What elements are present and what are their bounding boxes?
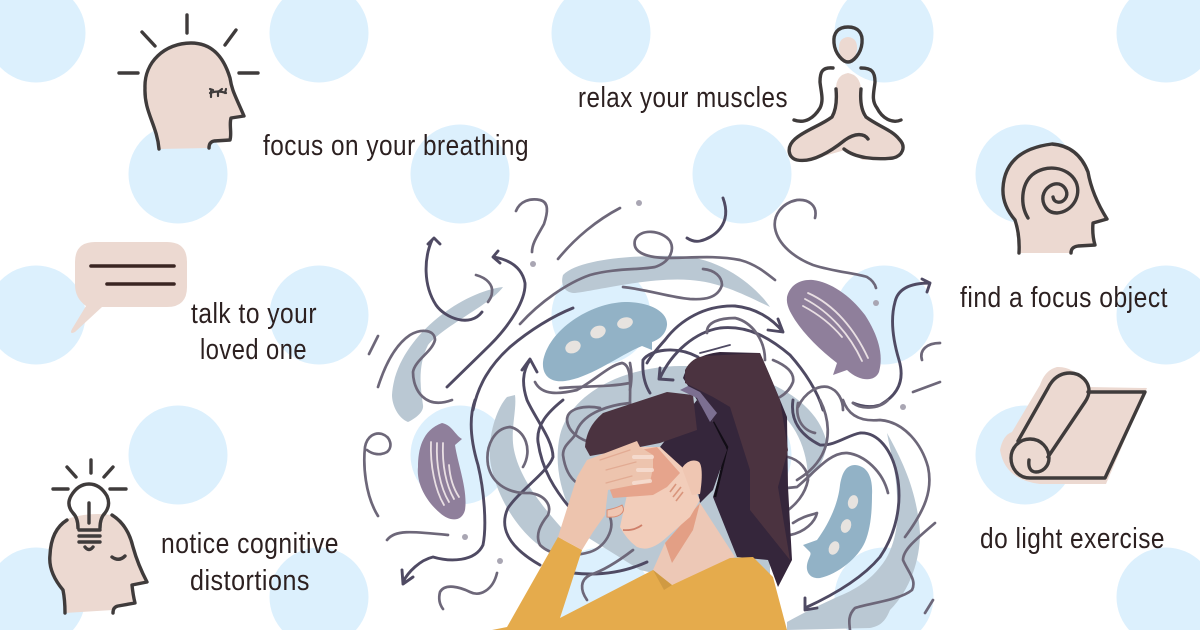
icon: meditating figure [789, 27, 903, 160]
woman: shirt [492, 537, 787, 630]
label: talk to your loved one: talk to your [191, 298, 317, 330]
tangled lines [364, 198, 940, 630]
speech bubble: blue right [803, 465, 872, 578]
icon: speech bubble [71, 242, 187, 333]
woman: front hair [585, 392, 697, 456]
label: focus on your breathing: focus on your breathing [263, 130, 529, 162]
label: notice cognitive distortions: notice cognitive [161, 528, 339, 560]
label: find a focus object: find a focus object [960, 282, 1168, 314]
speech bubble: purple top right [787, 280, 881, 379]
label: notice cognitive distortions: distortions [190, 565, 310, 597]
dots [462, 200, 906, 564]
label: notice cognitive distortions [161, 528, 339, 597]
label: talk to your loved one: loved one [200, 334, 307, 366]
illustration: woman with tangled thoughts [364, 198, 940, 630]
label: do light exercise: do light exercise [980, 523, 1165, 555]
woman: ponytail [683, 352, 792, 587]
swirl bands [392, 256, 920, 630]
label: relax your muscles: relax your muscles [578, 82, 788, 114]
woman: hand and arm [558, 441, 653, 550]
label: talk to your loved one [191, 298, 317, 366]
icon: head with rays, focus on breathing [119, 15, 258, 149]
speech bubble: blue top [543, 302, 667, 381]
woman: hair tie [680, 386, 717, 422]
speech bubble: purple left [418, 423, 466, 519]
icon: head with lightbulb [50, 460, 147, 613]
icon: yoga mat [1000, 367, 1147, 484]
woman: neck and face [607, 400, 735, 585]
icon: head with spiral [1003, 144, 1107, 253]
